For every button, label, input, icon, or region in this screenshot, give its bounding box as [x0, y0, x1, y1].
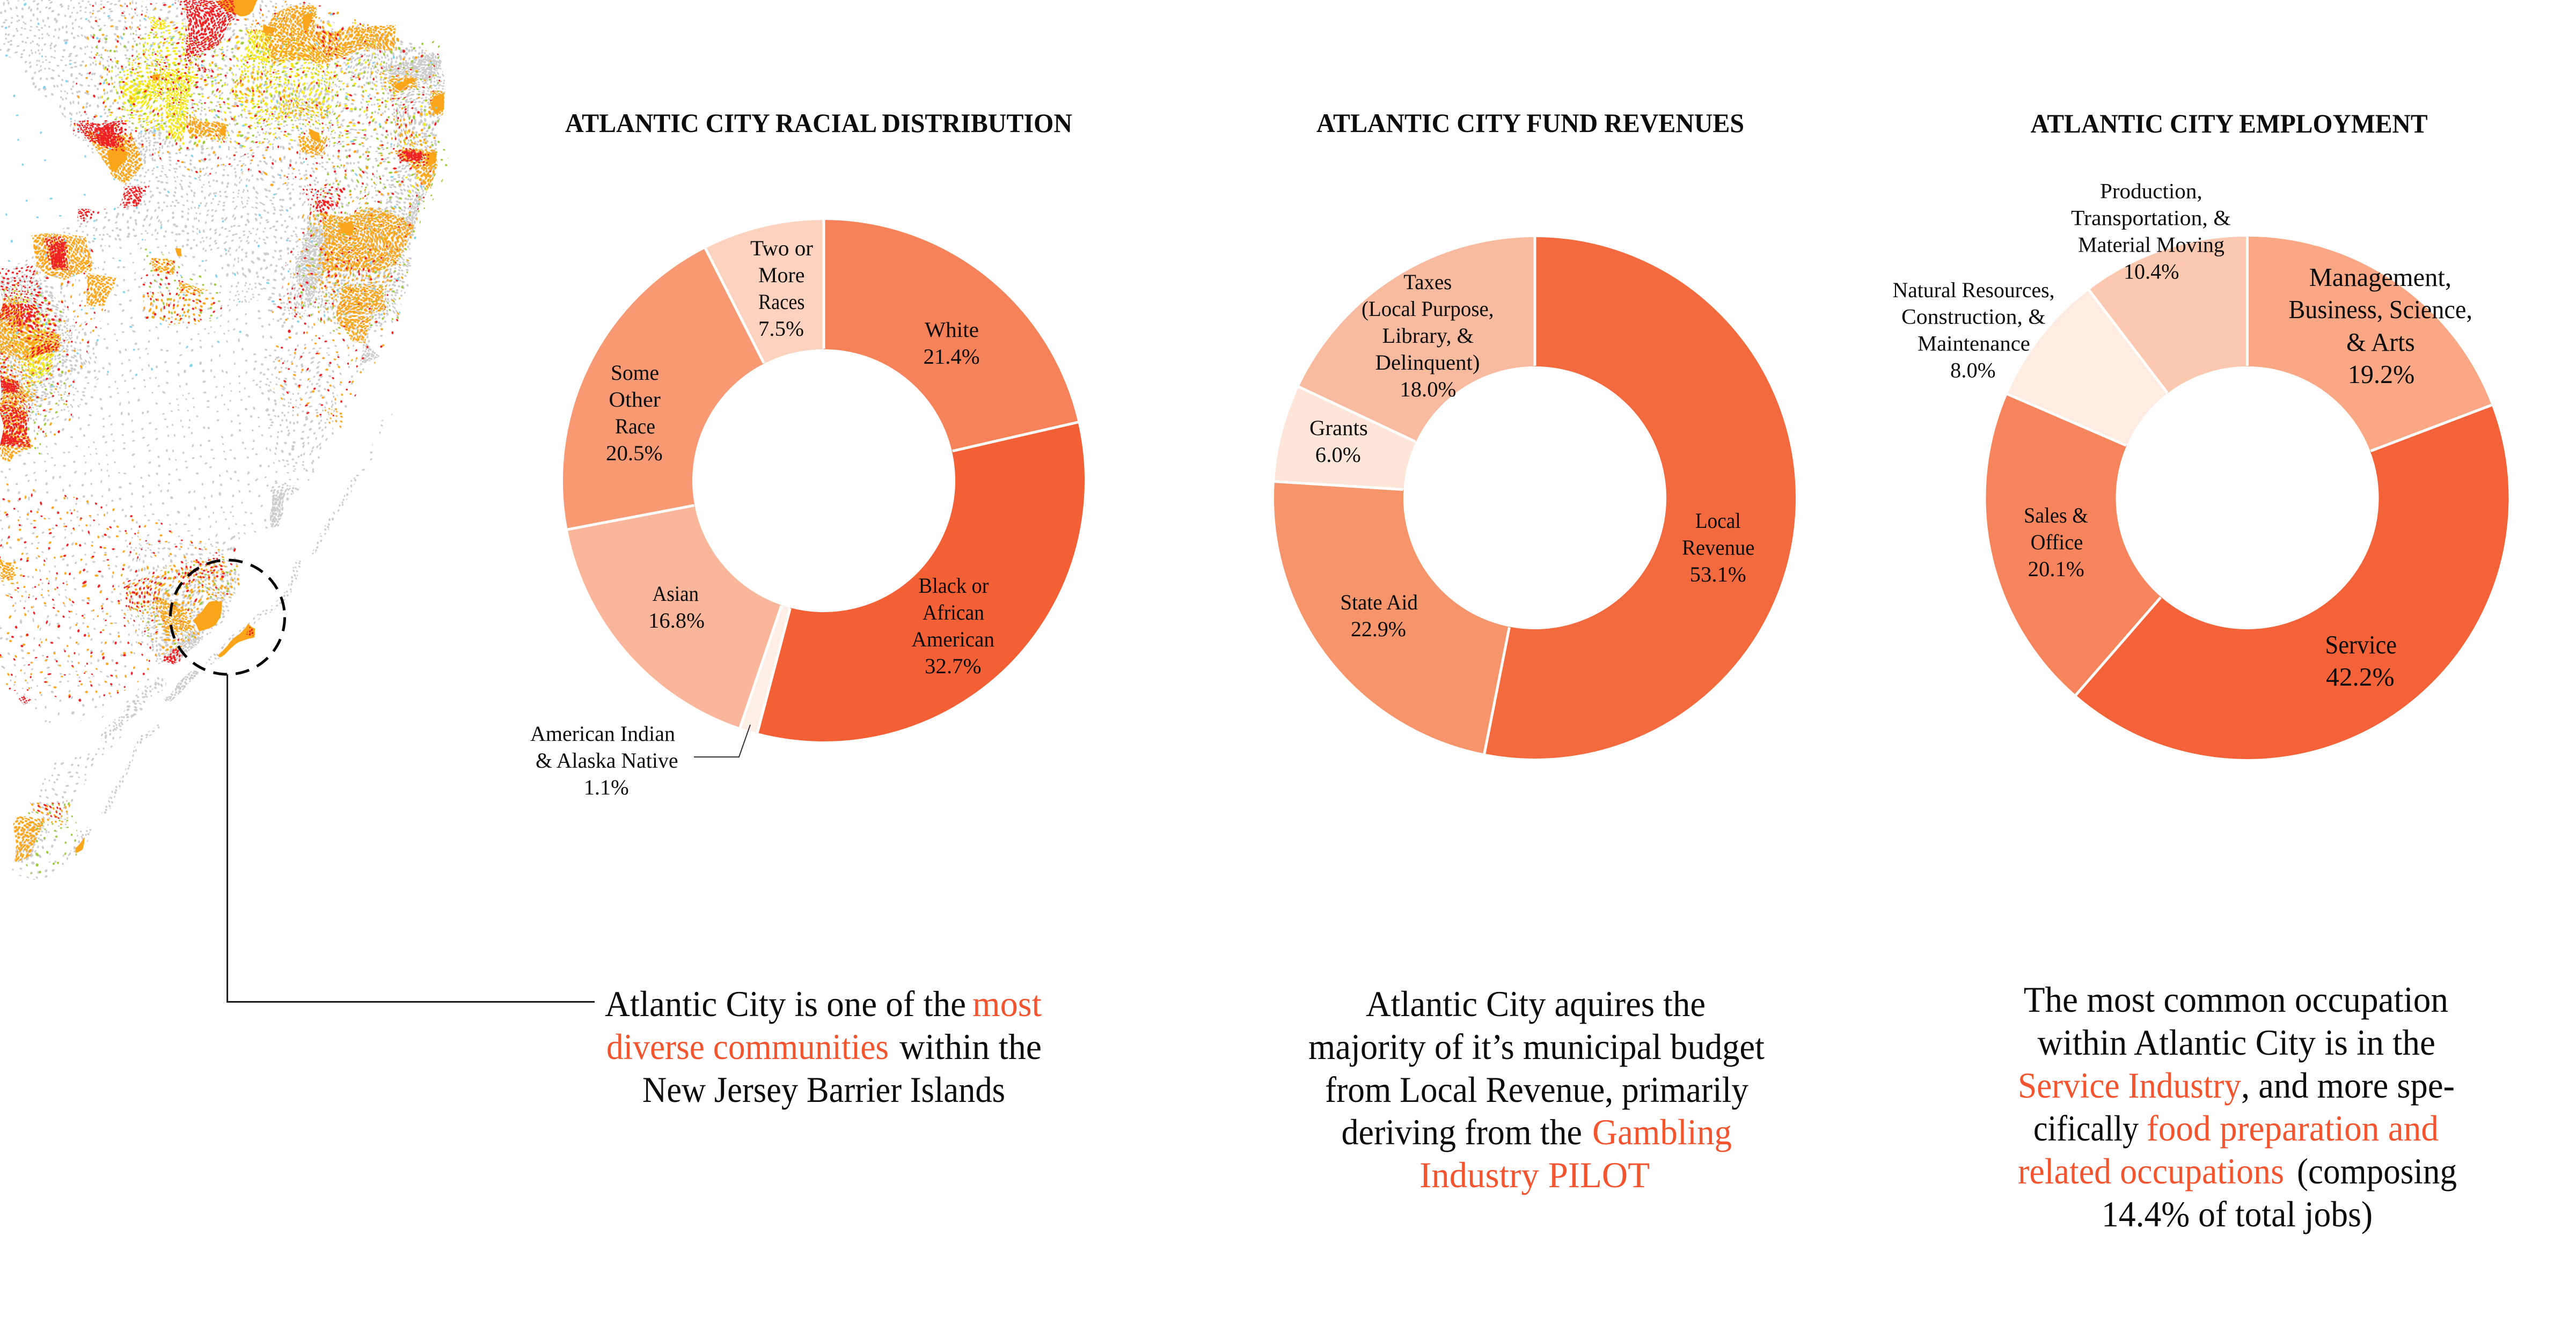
label: natural resources — [1892, 278, 2054, 383]
label: american indian and alaska native: American Indian — [530, 722, 675, 746]
label: american indian and alaska native: 1.1% — [584, 775, 629, 799]
leader line: american indian label — [694, 725, 750, 757]
label: production: Production, — [2100, 179, 2202, 203]
label: american indian and alaska native — [530, 722, 678, 799]
label: natural resources: Natural Resources, — [1892, 278, 2054, 302]
text block: employment caption: Service Industry — [2018, 1065, 2241, 1106]
label: management — [2288, 262, 2472, 389]
label: asian: 16.8% — [648, 608, 705, 632]
label: some other race: Race — [615, 414, 655, 438]
label: taxes: (Local Purpose, — [1362, 297, 1494, 321]
label: production: Transportation, & — [2071, 206, 2231, 230]
label: production — [2071, 179, 2231, 283]
label: some other race — [606, 361, 663, 465]
label: black or african american: American — [911, 627, 994, 651]
text block: revenue caption: Atlantic City aquires the — [1366, 983, 1706, 1024]
label: taxes: Delinquent) — [1375, 350, 1480, 374]
map: New Jersey population dots — [0, 0, 445, 878]
label: black or african american: African — [923, 600, 984, 624]
text block: diversity caption: most — [972, 983, 1042, 1024]
text block: employment caption — [2018, 979, 2457, 1234]
label: sales and office: Sales & — [2024, 503, 2088, 527]
label: state aid: 22.9% — [1351, 617, 1406, 641]
label: two or more races: 7.5% — [758, 317, 804, 341]
heading: employment: ATLANTIC CITY EMPLOYMENT — [2031, 108, 2428, 138]
text block: revenue caption — [1308, 983, 1765, 1195]
text block: revenue caption: from Local Revenue, primarily — [1325, 1069, 1748, 1110]
label: service — [2325, 630, 2397, 692]
text block: diversity caption: New Jersey Barrier Islands — [642, 1069, 1005, 1110]
label: white: 21.4% — [924, 344, 980, 369]
label: two or more races: Races — [758, 290, 805, 314]
leader line from map to first caption — [228, 674, 595, 1002]
text block: revenue caption: Industry PILOT — [1419, 1154, 1650, 1195]
donut chart: racial distribution — [560, 217, 1088, 745]
label: black or african american: 32.7% — [925, 654, 981, 678]
label: two or more races — [750, 236, 813, 341]
label: local revenue: Revenue — [1682, 535, 1755, 560]
label: local revenue: Local — [1695, 509, 1741, 533]
label: two or more races: More — [758, 263, 805, 287]
label: natural resources: Maintenance — [1918, 332, 2030, 356]
label: grants: Grants — [1309, 416, 1368, 440]
heading: racial distribution: ATLANTIC CITY RACIAL DISTRIBUTION — [565, 108, 1072, 138]
label: taxes: 18.0% — [1400, 377, 1456, 401]
panel: racial distribution — [530, 108, 1088, 799]
label: management: & Arts — [2346, 327, 2415, 357]
label: black or african american — [911, 573, 994, 678]
label: management: Management, — [2309, 262, 2451, 292]
label: white — [924, 318, 980, 369]
text block: diversity caption: diverse communities — [606, 1026, 889, 1067]
label: white: White — [925, 318, 979, 342]
label: management: 19.2% — [2348, 359, 2414, 389]
label: production: Material Moving — [2078, 233, 2224, 256]
text block: diversity caption: Atlantic City is one of the — [605, 983, 966, 1024]
label: state aid: State Aid — [1340, 590, 1418, 614]
text block: employment caption: food preparation and — [2147, 1108, 2439, 1149]
dashed circle: Atlantic City locator — [171, 560, 284, 674]
text block: diversity caption — [605, 983, 1042, 1110]
text block: employment caption: (composing — [2297, 1151, 2457, 1191]
label: sales and office: Office — [2031, 530, 2083, 554]
label: production: 10.4% — [2124, 260, 2179, 283]
label: asian — [648, 582, 705, 632]
text block: diversity caption: within the — [899, 1026, 1042, 1067]
label: sales and office — [2024, 503, 2088, 581]
text block: employment caption: 14.4% of total jobs) — [2102, 1194, 2373, 1234]
label: some other race: Some — [611, 361, 659, 385]
label: service: Service — [2325, 630, 2397, 659]
text block: employment caption: within Atlantic City is in the — [2038, 1022, 2435, 1063]
label: grants — [1309, 416, 1368, 467]
label: black or african american: Black or — [919, 573, 989, 598]
donut chart: employment — [1970, 221, 2524, 775]
label: some other race: Other — [609, 387, 661, 411]
label: grants: 6.0% — [1315, 443, 1361, 467]
label: asian: Asian — [653, 582, 699, 606]
label: taxes — [1362, 270, 1494, 401]
label: service: 42.2% — [2326, 662, 2395, 692]
label: sales and office: 20.1% — [2028, 557, 2084, 581]
heading: fund revenues: ATLANTIC CITY FUND REVENUES — [1316, 108, 1744, 138]
label: american indian and alaska native: & Alaska Native — [536, 748, 678, 773]
donut chart: fund revenues — [1274, 236, 1796, 759]
text block: revenue caption: majority of it’s municipal budget — [1308, 1026, 1765, 1067]
text block: employment caption: , and more spe- — [2241, 1065, 2455, 1106]
label: natural resources: Construction, & — [1901, 305, 2046, 329]
label: state aid — [1340, 590, 1418, 641]
label: management: Business, Science, — [2288, 295, 2472, 324]
label: local revenue — [1682, 509, 1755, 586]
label: local revenue: 53.1% — [1690, 562, 1746, 586]
label: two or more races: Two or — [750, 236, 813, 260]
text block: revenue caption: deriving from the — [1342, 1112, 1582, 1152]
text block: employment caption: related occupations — [2018, 1151, 2284, 1191]
label: some other race: 20.5% — [606, 441, 663, 465]
text block: revenue caption: Gambling — [1592, 1112, 1732, 1152]
text block: employment caption: The most common occupation — [2024, 979, 2448, 1020]
text block: employment caption: cifically — [2033, 1108, 2139, 1149]
panel: fund revenues — [1274, 108, 1796, 759]
label: natural resources: 8.0% — [1950, 358, 1996, 383]
label: taxes: Library, & — [1382, 323, 1474, 348]
label: taxes: Taxes — [1403, 270, 1452, 294]
panel: employment — [1892, 108, 2524, 775]
